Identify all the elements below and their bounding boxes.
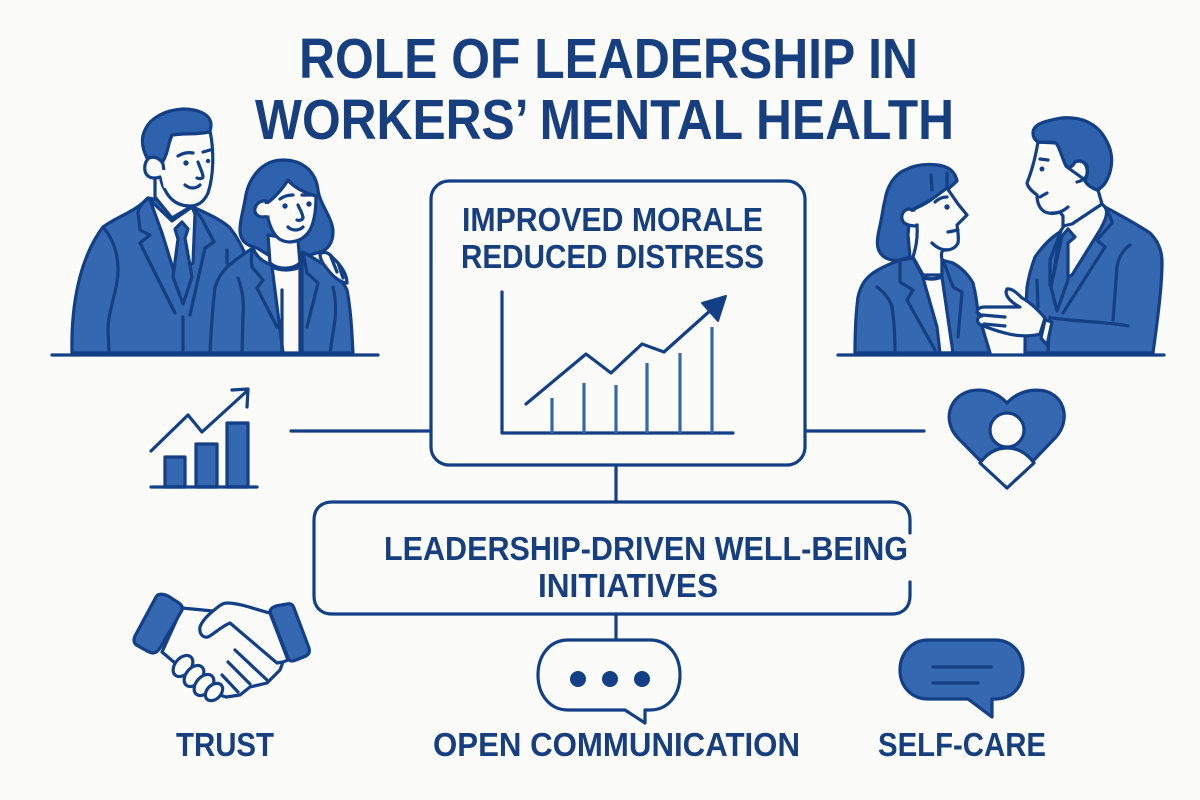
figure: man in suit	[72, 109, 246, 353]
line chart	[502, 292, 733, 433]
icon: heart with person	[949, 390, 1064, 488]
connector: right	[805, 429, 924, 433]
panel: improved morale	[431, 181, 805, 465]
man's head	[143, 109, 213, 218]
text: initiatives label: INITIATIVES	[538, 567, 718, 604]
illustration: man talking to woman	[838, 118, 1164, 355]
label: trust: TRUST	[176, 726, 274, 763]
heading: outcomes: REDUCED DISTRESS	[461, 238, 764, 275]
hand	[977, 289, 1052, 345]
arrowhead	[702, 296, 726, 321]
connector: center to initiatives	[614, 465, 618, 502]
ground line	[838, 353, 1164, 357]
label: open communication: OPEN COMMUNICATION	[433, 726, 800, 763]
heading: outcomes	[461, 201, 764, 275]
illustration: leader with hand on colleague's shoulder	[72, 109, 353, 353]
text: initiatives label: LEADERSHIP-DRIVEN WELL-BEING	[384, 530, 908, 567]
icon: speech bubble with dots	[538, 640, 680, 723]
figure: man in profile	[977, 118, 1162, 353]
icon: handshake	[134, 594, 309, 704]
text: initiatives label	[384, 530, 908, 604]
ground line	[52, 353, 378, 357]
title: ROLE OF LEADERSHIP IN	[299, 27, 918, 91]
title	[255, 27, 954, 152]
label: self-care: SELF-CARE	[878, 726, 1046, 763]
figure: woman	[210, 160, 353, 353]
icon: filled speech bubble	[900, 640, 1023, 717]
figure: woman in profile	[855, 164, 990, 353]
connector: left	[291, 429, 431, 433]
man's head	[1027, 118, 1112, 226]
icon: growth chart	[151, 389, 257, 487]
title: WORKERS’ MENTAL HEALTH	[255, 88, 954, 152]
panel: leadership-driven initiatives	[314, 502, 910, 614]
connector: initiatives to communication	[614, 614, 618, 640]
heading: outcomes: IMPROVED MORALE	[462, 201, 763, 238]
